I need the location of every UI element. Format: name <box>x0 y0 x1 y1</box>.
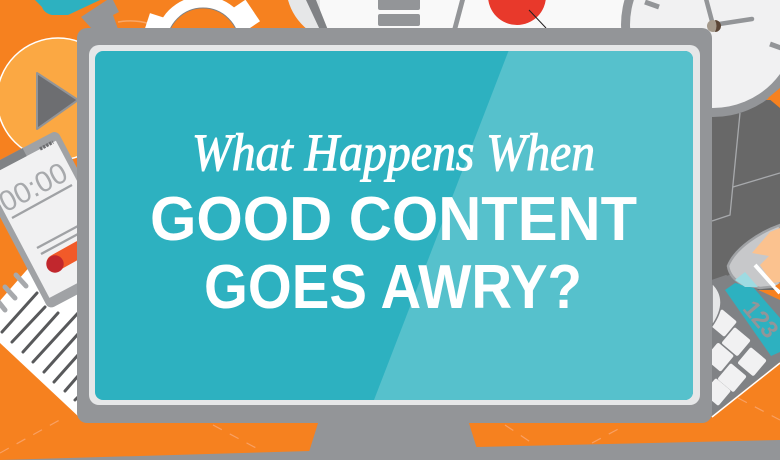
title: script line: What Happens When <box>192 124 595 182</box>
screen highlight <box>374 51 693 400</box>
icon: calculator <box>700 275 780 417</box>
title: second bold line: GOES AWRY? <box>204 253 582 322</box>
monitor stand <box>309 420 478 452</box>
icon: notebook <box>0 215 80 418</box>
icon: wall clock <box>621 0 780 117</box>
panel: monitor <box>77 28 712 423</box>
faint arc <box>118 21 150 24</box>
orange sliver beside clock <box>768 88 780 108</box>
base strip <box>0 440 780 460</box>
envelope stitched fold lines <box>0 398 780 453</box>
icon: red pin on paper <box>452 0 634 30</box>
icon: play button <box>0 38 119 160</box>
icon: teal cloud <box>35 0 100 15</box>
icon: timer device <box>0 130 129 310</box>
icon: document with bars <box>288 0 460 30</box>
panel: dark tablet on the right <box>700 100 780 290</box>
icon: gear <box>142 0 260 92</box>
title: first bold line: GOOD CONTENT <box>150 185 637 254</box>
icon: stopwatch knob <box>81 0 119 29</box>
icon: glasses <box>712 225 780 326</box>
